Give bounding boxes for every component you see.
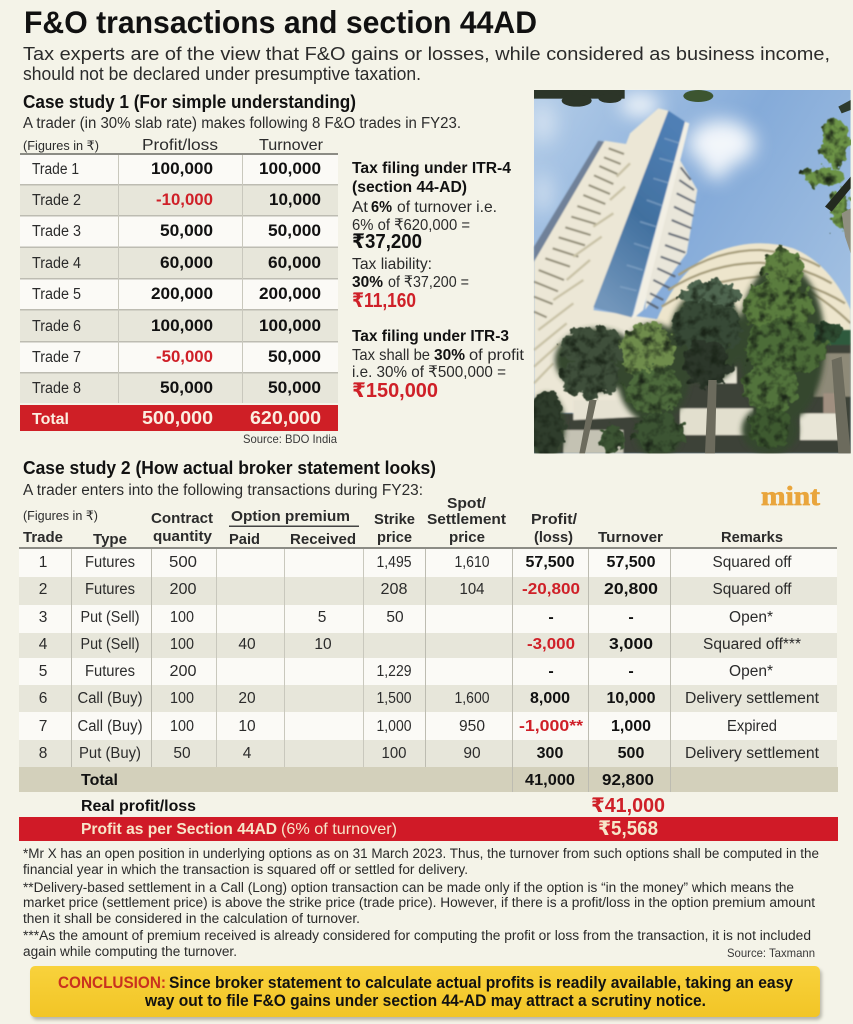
total row: 92,800 bbox=[602, 772, 654, 789]
mint logo: mint bbox=[761, 481, 820, 511]
contract quantities: 100 bbox=[170, 636, 194, 653]
centre palm bbox=[672, 280, 742, 387]
contract quantities: 100 bbox=[170, 609, 194, 626]
real profit row: Real profit/loss bbox=[81, 798, 196, 815]
remarks: Squared off bbox=[712, 581, 792, 598]
tax filing under ITR-4: At bbox=[352, 199, 369, 216]
table header bbox=[20, 137, 338, 155]
profit/loss values: 50,000 bbox=[160, 221, 213, 240]
profit/loss values: 50,000 bbox=[160, 378, 213, 397]
conclusion box: way out to file F&O gains under section 44-AD may attract a scrutiny notice. bbox=[144, 992, 706, 1010]
contract quantities: 100 bbox=[170, 718, 194, 735]
turnover values: 100,000 bbox=[259, 159, 321, 178]
row labels: Trade 2 bbox=[32, 192, 81, 209]
remarks: Delivery settlement bbox=[685, 745, 820, 762]
remarks: Squared off bbox=[712, 554, 792, 571]
trade numbers: 2 bbox=[39, 581, 47, 598]
option premium values: 20 bbox=[238, 690, 256, 707]
tax filing under ITR-4: 30% bbox=[352, 274, 383, 291]
turnover values: 60,000 bbox=[268, 253, 321, 272]
total row: 500,000 bbox=[142, 408, 213, 428]
turnover values: 57,500 bbox=[606, 554, 656, 571]
turnover values: 20,800 bbox=[604, 581, 658, 598]
footnotes: financial year in which the transaction is squared off or settled for delivery. bbox=[23, 862, 468, 877]
option premium values: 40 bbox=[238, 636, 256, 653]
table header: Profit/ bbox=[531, 511, 578, 528]
option premium values: 10 bbox=[314, 636, 332, 653]
section 44AD profit row: (6% of turnover) bbox=[281, 821, 397, 838]
photo: stock exchange tower and dome bbox=[528, 90, 851, 460]
row labels bbox=[32, 161, 81, 397]
remarks: Squared off*** bbox=[703, 636, 801, 653]
row labels: Trade 5 bbox=[32, 286, 81, 303]
turnover values: 1,000 bbox=[611, 718, 651, 735]
profit or loss values bbox=[519, 554, 584, 762]
footnotes bbox=[23, 846, 819, 959]
middle tree bbox=[598, 323, 685, 453]
trade types: Put (Sell) bbox=[80, 609, 140, 626]
remarks: Open* bbox=[729, 663, 773, 680]
tax filing under ITR-4 bbox=[352, 160, 511, 312]
row labels: Trade 3 bbox=[32, 223, 81, 240]
total row: Total bbox=[32, 411, 69, 428]
tax filing under ITR-4: of turnover i.e. bbox=[397, 199, 497, 216]
tax filing under ITR-3: Tax shall be bbox=[352, 347, 430, 364]
profit/loss values: 100,000 bbox=[151, 159, 213, 178]
trade numbers: 8 bbox=[39, 745, 47, 762]
turnover values: 3,000 bbox=[609, 636, 653, 653]
trees bbox=[530, 248, 842, 457]
turnover values bbox=[259, 159, 321, 397]
table header bbox=[19, 495, 837, 549]
tax filing under ITR-4: 6% bbox=[371, 199, 392, 216]
table header: Remarks bbox=[721, 529, 783, 546]
table header: Type bbox=[93, 531, 127, 548]
table header: Received bbox=[290, 531, 356, 548]
intro text: Tax experts are of the view that F&O gains or losses, while considered as business income, bbox=[23, 43, 830, 64]
strike prices: 50 bbox=[386, 609, 404, 626]
row labels: Trade 8 bbox=[32, 380, 81, 397]
settlement prices: 1,600 bbox=[454, 690, 490, 707]
profit or loss values: 8,000 bbox=[530, 690, 570, 707]
glass facade bbox=[593, 111, 685, 317]
heading: case study 2: Case study 2 (How actual broker statement looks) bbox=[23, 458, 436, 478]
trade types: Futures bbox=[85, 554, 135, 571]
table header: Settlement bbox=[427, 511, 506, 528]
option premium values: 4 bbox=[243, 745, 252, 762]
profit or loss values: - bbox=[548, 663, 554, 680]
table header: Contract bbox=[151, 510, 213, 527]
tax filing under ITR-3: Tax filing under ITR-3 bbox=[352, 328, 509, 345]
table header: Trade bbox=[23, 529, 63, 546]
case study 2 description: A trader enters into the following transactions during FY23: bbox=[23, 482, 423, 499]
strike prices: 100 bbox=[382, 745, 407, 762]
trade types: Futures bbox=[85, 581, 135, 598]
option premium values: 10 bbox=[238, 718, 256, 735]
source: Taxmann: Source: Taxmann bbox=[727, 946, 815, 960]
table header: (loss) bbox=[534, 529, 573, 546]
footnotes: market price (settlement price) is above the strike price (trade price). However, if there is a profit/loss in the option premium amount bbox=[23, 895, 815, 910]
settlement prices: 1,610 bbox=[454, 554, 490, 571]
trade numbers: 4 bbox=[39, 636, 48, 653]
conclusion box: CONCLUSION: bbox=[58, 974, 166, 992]
remarks bbox=[685, 554, 820, 762]
profit or loss values: -20,800 bbox=[522, 581, 580, 598]
table header: (Figures in ₹) bbox=[23, 508, 98, 523]
strike prices: 1,500 bbox=[376, 690, 412, 707]
palm trunks bbox=[579, 357, 851, 453]
tax filing under ITR-4: (section 44-AD) bbox=[352, 179, 467, 196]
towers bbox=[534, 108, 697, 413]
contract quantities: 50 bbox=[173, 745, 191, 762]
turnover values: 500 bbox=[618, 745, 644, 762]
tax filing under ITR-3: i.e. 30% of ₹500,000 = bbox=[352, 364, 506, 381]
table header: Strike bbox=[374, 511, 415, 528]
row labels: Trade 1 bbox=[32, 161, 79, 178]
settlement prices: 90 bbox=[463, 745, 481, 762]
profit or loss values: 57,500 bbox=[526, 554, 575, 571]
right tree bbox=[742, 248, 842, 448]
trade numbers: 7 bbox=[39, 718, 47, 735]
turnover values: 10,000 bbox=[269, 190, 321, 209]
settlement prices: 950 bbox=[459, 718, 485, 735]
tax filing under ITR-3: ₹150,000 bbox=[352, 380, 438, 402]
table header: price bbox=[449, 529, 485, 546]
section 44AD profit row bbox=[19, 817, 838, 841]
heading: case study 1: Case study 1 (For simple understanding) bbox=[23, 92, 356, 112]
tax filing under ITR-4: ₹11,160 bbox=[352, 290, 416, 312]
trade types: Put (Sell) bbox=[80, 636, 140, 653]
right wing bbox=[645, 160, 697, 310]
trade numbers: 3 bbox=[39, 609, 47, 626]
contract quantities: 500 bbox=[169, 554, 197, 571]
clouds bbox=[530, 93, 755, 213]
settlement prices: 104 bbox=[460, 581, 485, 598]
source: BDO India: Source: BDO India bbox=[243, 432, 337, 446]
title: F&O transactions and section 44AD bbox=[24, 4, 537, 40]
profit/loss values bbox=[151, 159, 213, 397]
remarks: Expired bbox=[727, 718, 777, 735]
profit/loss values: 60,000 bbox=[160, 253, 213, 272]
turnover values bbox=[604, 554, 658, 762]
strike prices: 1,000 bbox=[376, 718, 412, 735]
table header: Turnover bbox=[598, 529, 663, 546]
contract quantities: 200 bbox=[170, 663, 197, 680]
total row: 41,000 bbox=[525, 772, 575, 789]
strike prices bbox=[376, 554, 412, 762]
strike prices: 1,229 bbox=[376, 663, 412, 680]
trade types: Put (Buy) bbox=[79, 745, 141, 762]
left tower edge bbox=[534, 141, 605, 263]
real profit row bbox=[81, 795, 665, 817]
dome bbox=[657, 243, 851, 353]
tax filing under ITR-3: 30% bbox=[434, 347, 465, 364]
profit/loss values: 100,000 bbox=[151, 316, 213, 335]
turnover values: 10,000 bbox=[606, 690, 656, 707]
row bands bbox=[19, 549, 837, 767]
row labels: Trade 6 bbox=[32, 318, 81, 335]
contract quantities bbox=[169, 554, 197, 762]
trade types: Call (Buy) bbox=[78, 690, 142, 707]
strike prices: 1,495 bbox=[376, 554, 412, 571]
cream wings bbox=[534, 108, 668, 413]
table header: (Figures in ₹) bbox=[23, 138, 99, 153]
option premium values bbox=[238, 609, 332, 762]
table header: Paid bbox=[229, 531, 260, 548]
option premium values: 5 bbox=[318, 609, 326, 626]
remarks: Delivery settlement bbox=[685, 690, 820, 707]
footnotes: **Delivery-based settlement in a Call (Long) option transaction can be made only if the option is “in the money” which means the bbox=[23, 880, 794, 895]
footnotes: *Mr X has an open position in underlying options as on 31 March 2023. Thus, the turnover from such options shall be computed in the bbox=[23, 846, 819, 861]
section 44AD profit row: ₹5,568 bbox=[598, 818, 658, 840]
strike prices: 208 bbox=[380, 581, 408, 598]
turnover values: 200,000 bbox=[259, 284, 321, 303]
contract quantities: 200 bbox=[170, 581, 197, 598]
tree shadow mass bbox=[528, 263, 825, 460]
settlement prices bbox=[454, 554, 490, 762]
trade numbers: 6 bbox=[39, 690, 47, 707]
table header: price bbox=[377, 529, 412, 546]
footnotes: ***As the amount of premium received is already considered for computing the profit or loss from the transaction, it is not included bbox=[23, 928, 811, 943]
table: case study 2 transactions bbox=[19, 495, 838, 841]
total row: 620,000 bbox=[250, 408, 321, 428]
row labels: Trade 4 bbox=[32, 255, 81, 272]
table header: Profit/loss bbox=[142, 137, 218, 154]
intro text bbox=[23, 43, 830, 84]
tax filing under ITR-4: Tax filing under ITR-4 bbox=[352, 160, 511, 177]
trade numbers: 5 bbox=[39, 663, 47, 680]
footnotes: again while computing the turnover. bbox=[23, 944, 237, 959]
left palm bbox=[530, 327, 627, 457]
window stripes bbox=[534, 148, 624, 317]
turnover values: - bbox=[628, 663, 634, 680]
tax filing under ITR-4: ₹37,200 bbox=[352, 231, 422, 253]
profit/loss values: -50,000 bbox=[156, 347, 213, 366]
table header: Turnover bbox=[259, 137, 324, 154]
profit or loss values: -3,000 bbox=[527, 636, 575, 653]
footnotes: then it shall be considered in the calculation of turnover. bbox=[23, 911, 360, 926]
tax filing under ITR-3 bbox=[352, 328, 525, 402]
intro text: should not be declared under presumptive taxation. bbox=[23, 63, 421, 84]
real profit row: ₹41,000 bbox=[591, 795, 665, 817]
profit/loss values: 200,000 bbox=[151, 284, 213, 303]
profit/loss values: -10,000 bbox=[156, 190, 213, 209]
turnover values: 50,000 bbox=[268, 221, 321, 240]
conclusion box: Since broker statement to calculate actual profits is readily available, taking an easy bbox=[169, 974, 794, 992]
table header: quantity bbox=[153, 528, 213, 545]
profit or loss values: -1,000** bbox=[519, 718, 584, 735]
trade types: Call (Buy) bbox=[78, 718, 142, 735]
total row: Total bbox=[81, 772, 118, 789]
top left branch bbox=[534, 90, 713, 107]
total row bbox=[19, 767, 838, 792]
contract quantities: 100 bbox=[170, 690, 194, 707]
trade types: Futures bbox=[85, 663, 135, 680]
turnover values: - bbox=[628, 609, 634, 626]
tax filing under ITR-4: 6% of ₹620,000 = bbox=[352, 217, 470, 234]
turnover values: 50,000 bbox=[268, 378, 321, 397]
total row bbox=[20, 405, 338, 431]
section 44AD profit row: Profit as per Section 44AD bbox=[81, 821, 277, 838]
lower building bbox=[534, 330, 851, 453]
turnover values: 50,000 bbox=[268, 347, 321, 366]
tax filing under ITR-4: of ₹37,200 = bbox=[388, 274, 469, 291]
trade numbers: 1 bbox=[39, 554, 47, 571]
turnover values: 100,000 bbox=[259, 316, 321, 335]
remarks: Open* bbox=[729, 609, 773, 626]
table: case study 1 trades bbox=[20, 137, 338, 431]
profit or loss values: - bbox=[548, 609, 554, 626]
tax filing under ITR-3: of profit bbox=[469, 347, 525, 364]
case study 1 description: A trader (in 30% slab rate) makes following 8 F&O trades in FY23. bbox=[23, 115, 461, 132]
conclusion box bbox=[30, 966, 822, 1020]
profit or loss values: 300 bbox=[537, 745, 563, 762]
table header: Option premium bbox=[231, 508, 350, 525]
table header: Spot/ bbox=[447, 495, 487, 512]
tax filing under ITR-4: Tax liability: bbox=[352, 256, 432, 273]
trade types bbox=[78, 554, 142, 762]
top right foliage bbox=[803, 100, 851, 253]
row labels: Trade 7 bbox=[32, 349, 81, 366]
row bands bbox=[20, 155, 338, 403]
trade numbers bbox=[39, 554, 48, 762]
